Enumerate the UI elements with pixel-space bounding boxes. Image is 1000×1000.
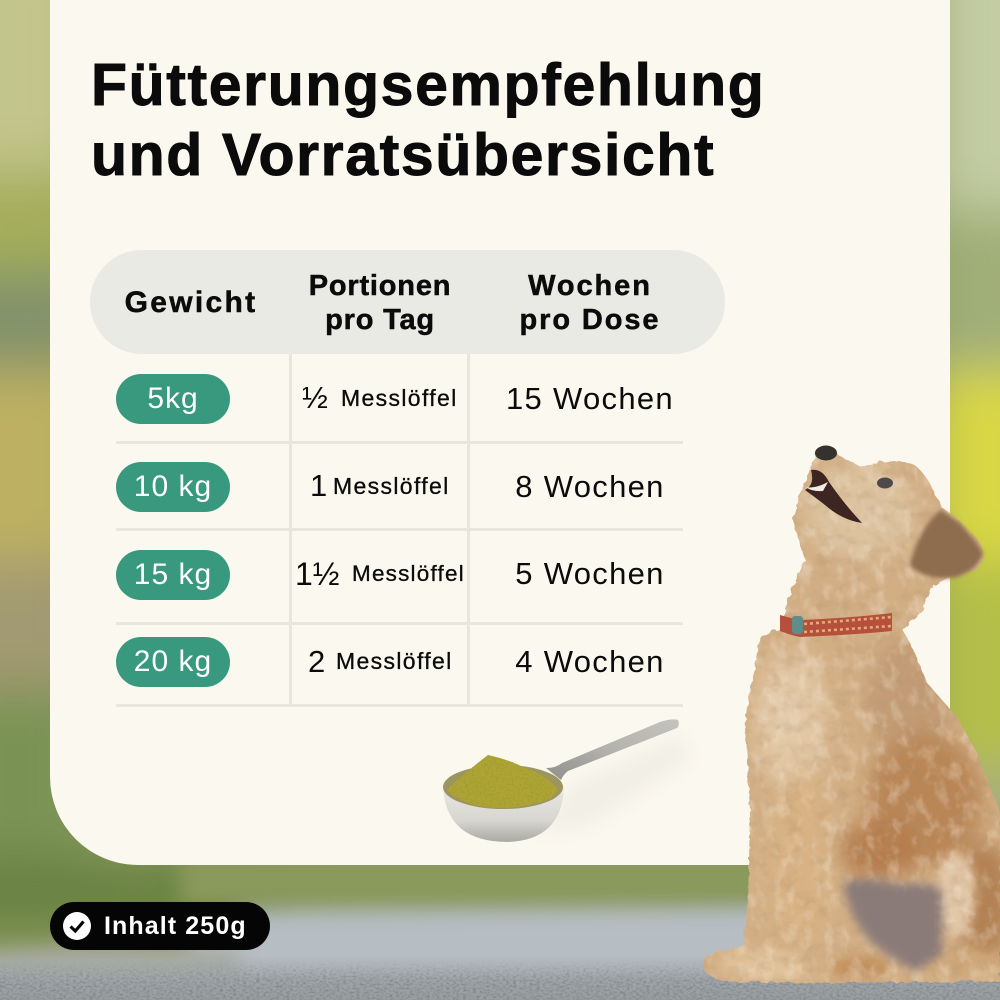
- panel: cream card: [50, 0, 950, 865]
- row 3: 15 kg: 1½: [295, 556, 339, 592]
- table header bar: [90, 250, 725, 354]
- header: Gewicht: Gewicht: [125, 286, 257, 319]
- row 1: 5kg: 15 Wochen: [506, 381, 674, 416]
- shading patches: [755, 462, 1000, 960]
- row 4: 20 kg: 20 kg: [134, 645, 212, 678]
- row 3: 15 kg: [116, 550, 665, 600]
- table grid lines: [116, 354, 683, 707]
- ear: [910, 510, 983, 578]
- row 3: 15 kg: 5 Wochen: [515, 556, 665, 591]
- icon: measuring scoop with powder: [443, 719, 679, 842]
- nose: [815, 446, 837, 460]
- header: Wochen pro Dose: [520, 270, 660, 336]
- row 3: 15 kg: 15 kg: [134, 558, 212, 591]
- icon: check mark: [63, 912, 91, 940]
- row 1: 5kg: [116, 374, 674, 424]
- header: Portionen pro Tag: pro Tag: [325, 304, 435, 336]
- eye: [877, 478, 893, 488]
- row 4: 20 kg: 2: [308, 644, 325, 679]
- row 1: 5kg: 5kg: [147, 382, 199, 415]
- row 4: 20 kg: Messlöffel: [336, 648, 453, 674]
- badge text: Inhalt 250g: [104, 912, 247, 940]
- gravel texture: [0, 960, 1000, 1000]
- green band behind road: [180, 855, 780, 905]
- row 4: 20 kg: 4 Wochen: [515, 644, 665, 679]
- header: Wochen pro Dose: Wochen: [528, 270, 652, 302]
- title: und Vorratsübersicht: [91, 122, 715, 188]
- badge: Inhalt 250g: [50, 902, 270, 950]
- row 2: 10 kg: Messlöffel: [333, 473, 450, 499]
- row 1: 5kg: Messlöffel: [341, 385, 458, 411]
- title: [91, 52, 765, 188]
- collar: [780, 613, 892, 637]
- row 2: 10 kg: 1: [310, 468, 327, 503]
- header: Portionen pro Tag: Portionen: [309, 270, 451, 302]
- mouth: [805, 470, 862, 523]
- row 1: 5kg: ½: [302, 380, 328, 415]
- row 2: 10 kg: 8 Wochen: [515, 469, 665, 504]
- header: Wochen pro Dose: pro Dose: [520, 304, 660, 336]
- row 3: 15 kg: Messlöffel: [352, 561, 465, 586]
- header: Portionen pro Tag: [309, 270, 451, 336]
- row 2: 10 kg: 10 kg: [134, 470, 212, 503]
- row 2: 10 kg: [116, 462, 665, 512]
- title: Fütterungsempfehlung: [91, 52, 765, 118]
- photo: sitting dog: [703, 446, 1000, 984]
- fur texture: [705, 462, 992, 980]
- row 4: 20 kg: [116, 637, 665, 687]
